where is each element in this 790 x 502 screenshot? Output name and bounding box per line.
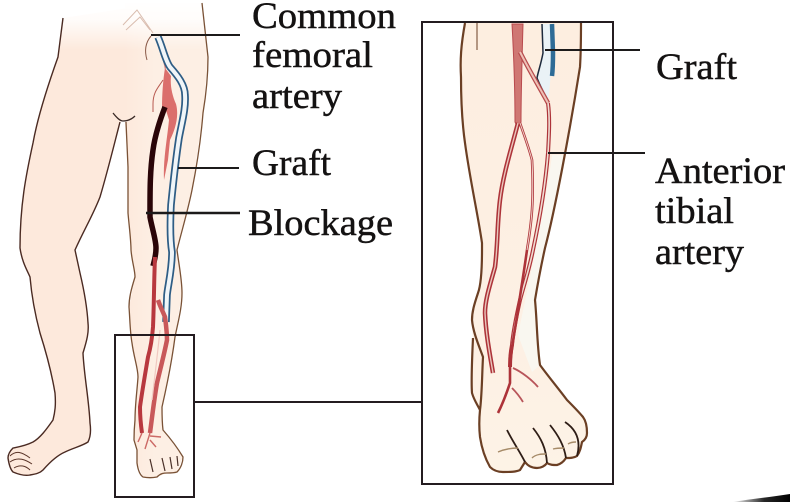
blockage xyxy=(150,107,165,266)
dark corner shadow xyxy=(733,494,790,502)
left branch artery xyxy=(485,123,518,373)
upper branch to graft xyxy=(520,52,548,103)
graft dark wall xyxy=(537,24,548,103)
toes of far foot xyxy=(10,452,32,470)
far leg and torso skin xyxy=(8,3,160,475)
graft xyxy=(158,37,185,322)
middle branch artery xyxy=(498,123,533,413)
lower arteries on foot xyxy=(512,368,538,402)
connector line to inset xyxy=(194,401,422,403)
label: inset graft: Graft xyxy=(656,47,738,88)
crotch crease xyxy=(113,113,135,121)
pale front of shin xyxy=(518,155,566,372)
label: common femoral artery: artery xyxy=(252,76,342,117)
label: anterior tibial artery xyxy=(655,151,786,273)
far leg outline xyxy=(8,18,120,475)
common femoral artery xyxy=(155,38,170,70)
graft in inset xyxy=(537,24,553,103)
near leg skin xyxy=(125,3,208,477)
label: anterior tibial artery: Anterior xyxy=(655,151,786,192)
toenails xyxy=(498,442,576,458)
inset border xyxy=(422,22,613,484)
label: common femoral artery: femoral xyxy=(252,35,373,76)
small zoom box on foot xyxy=(115,335,194,497)
near leg outline xyxy=(126,3,208,478)
inset leg outline xyxy=(461,23,587,472)
anterior tibial artery xyxy=(510,103,549,367)
label: anterior tibial artery: tibial xyxy=(655,191,734,232)
knee crease xyxy=(476,23,478,50)
leader: blockage xyxy=(146,212,240,214)
groin fold xyxy=(146,36,151,60)
inset skin xyxy=(461,23,587,472)
graft blue wall xyxy=(552,24,553,76)
leader: common femoral artery xyxy=(151,34,240,36)
main artery xyxy=(512,24,523,128)
inset panel: lower leg and foot xyxy=(461,23,587,472)
toe lines xyxy=(507,422,579,463)
groin creases xyxy=(123,10,153,33)
top white fade xyxy=(55,0,215,50)
label: graft: Graft xyxy=(252,143,332,184)
toes of near foot xyxy=(150,456,178,472)
leader: graft xyxy=(178,167,239,169)
leader: anterior tibial artery xyxy=(548,152,645,154)
label: blockage: Blockage xyxy=(248,203,393,244)
left figure: whole legs with arteries and graft xyxy=(8,0,215,478)
label: anterior tibial artery: artery xyxy=(655,232,744,273)
leader: inset graft xyxy=(545,49,640,51)
label: common femoral artery xyxy=(252,0,396,117)
lower leg arteries xyxy=(140,257,155,433)
